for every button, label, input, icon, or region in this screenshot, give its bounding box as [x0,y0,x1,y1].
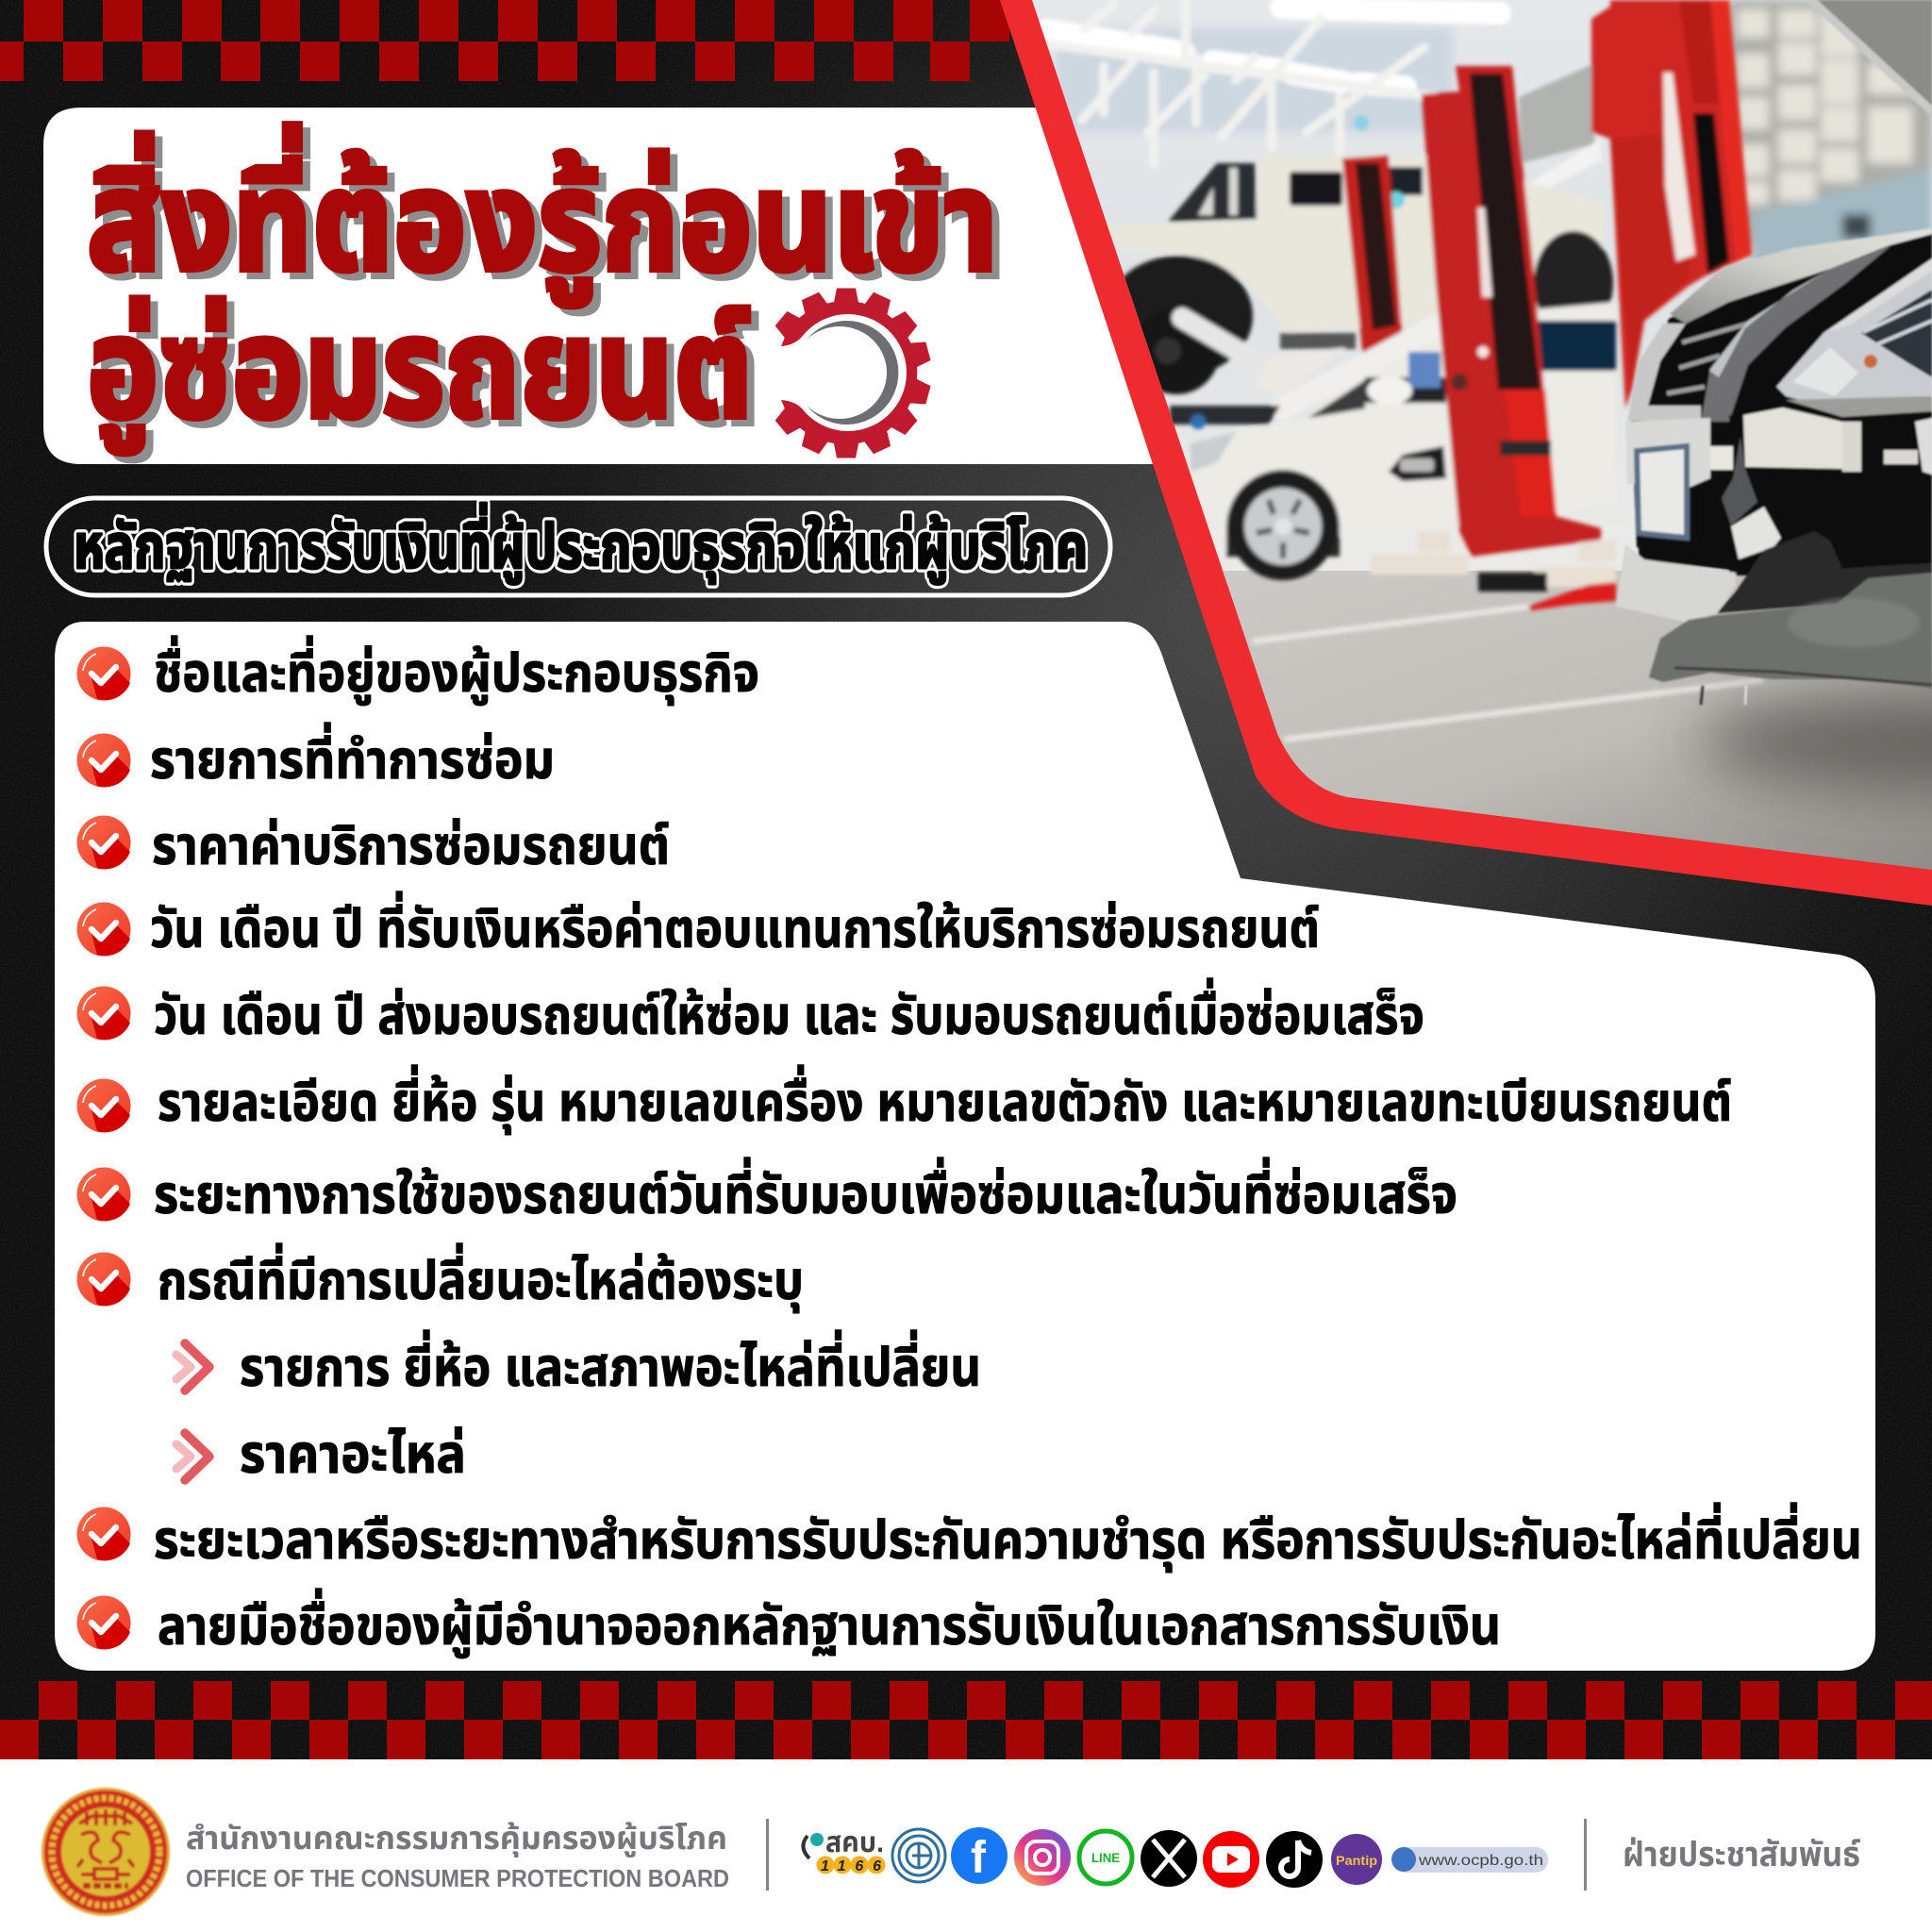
agency name [186,1821,729,1892]
icon: OCPB [892,1829,945,1882]
checklist item 5: วัน เดือน ปี ส่งมอบรถยนต์ให้ซ่อม และ รับมอบรถยนต์เมื่อซ่อมเสร็จ [154,977,1424,1046]
title heading: อู่ซ่อมรถยนต์ [94,297,760,460]
icon: X [1141,1830,1197,1887]
right red lift [1591,0,1752,408]
floor shadow [1698,689,1932,792]
ceiling trusses [1047,0,1437,163]
photo panel: car repair workshop [1000,0,1932,906]
icon: Pantip: Pantip [1336,1853,1377,1868]
icon: agency seal [42,1788,170,1916]
checklist item 3: ราคาค่าบริการซ่อมรถยนต์ [152,816,670,876]
checklist item 2: รายการที่ทำการซ่อม [150,722,555,791]
checklist item 8: กรณีที่มีการเปลี่ยนอะไหล่ต้องระบุ [158,1242,804,1313]
footer band [0,1759,1932,1932]
checklist panel [55,622,1875,1671]
department label: ฝ่ายประชาสัมพันธ์ [1623,1835,1861,1874]
icon: TikTok [1266,1831,1323,1888]
sub item: parts price: ราคาอะไหล่ [240,1424,466,1485]
website pill [1391,1847,1548,1873]
white pickup [1104,156,1613,394]
website pill: www.ocpb.go.th [1418,1853,1543,1869]
damaged front car [1616,0,1932,705]
hotline logo: 1166 [821,1858,881,1874]
checklist item 7: ระยะทางการใช้ของรถยนต์วันที่รับมอบเพื่อซ่อมและในวันที่ซ่อมเสร็จ [154,1157,1457,1225]
checklist item 1: ชื่อและที่อยู่ของผู้ประกอบธุรกิจ [154,635,759,707]
hotline logo: สคบ. [825,1827,884,1858]
mid wall windows [1519,63,1594,163]
bottom checkered strip [0,1681,1932,1759]
jack and red base [1478,573,1547,591]
icon: LINE [1079,1831,1132,1884]
white sedan [1170,302,1616,580]
icon: gear [773,289,932,458]
title heading: อู่ซ่อมรถยนต์ [87,291,753,454]
agency name: สำนักงานคณะกรรมการคุ้มครองผู้บริโภค [186,1821,727,1857]
agency name: OFFICE OF THE CONSUMER PROTECTION BOARD [186,1864,729,1892]
right wall windows [1728,0,1932,269]
floor markings [1252,607,1763,740]
back red lift [1340,153,1405,355]
subtitle pill: หลักฐานการรับเงินที่ผู้ประกอบธุรกิจให้แก่ผู้บริโภค [74,503,1088,584]
shop floor blocks [1371,531,1616,587]
subtitle pill: หลักฐานการรับเงินที่ผู้ประกอบธุรกิจให้แก่ผู้บริโภค [74,503,1088,584]
icon: Facebook [951,1827,1008,1884]
icon: Facebook: f [971,1833,987,1883]
title heading: สิ่งที่ต้องรู้ก่อนเข้า [87,123,998,307]
title panel [43,108,1153,464]
icon: YouTube [1203,1831,1259,1888]
checklist item 9: ระยะเวลาหรือระยะทางสำหรับการรับประกันความชำรุด หรือการรับประกันอะไหล่ที่เปลี่ยน [154,1502,1862,1573]
icon: Pantip [1331,1834,1382,1885]
checklist item 6: รายละเอียด ยี่ห้อ รุ่น หมายเลขเครื่อง หมายเลขตัวถัง และหมายเลขทะเบียนรถยนต์ [158,1064,1732,1135]
middle red lift [1422,66,1601,557]
icon: Instagram [1014,1829,1071,1886]
hotline logo [803,1827,885,1874]
subtitle pill [46,498,1110,595]
icon: LINE: LINE [1091,1850,1120,1865]
ceiling lights [1047,8,1500,87]
title heading: สิ่งที่ต้องรู้ก่อนเข้า [94,129,1006,313]
checklist item 10: ลายมือชื่อของผู้มีอำนาจออกหลักฐานการรับเงินในเอกสารการรับเงิน [158,1588,1501,1659]
top checkered strip [0,0,1009,81]
sub item: parts list: รายการ ยี่ห้อ และสภาพอะไหล่ที่เปลี่ยน [240,1329,981,1398]
title heading [87,123,1006,460]
checklist item 4: วัน เดือน ปี ที่รับเงินหรือค่าตอบแทนการให้บริการซ่อมรถยนต์ [150,891,1320,959]
